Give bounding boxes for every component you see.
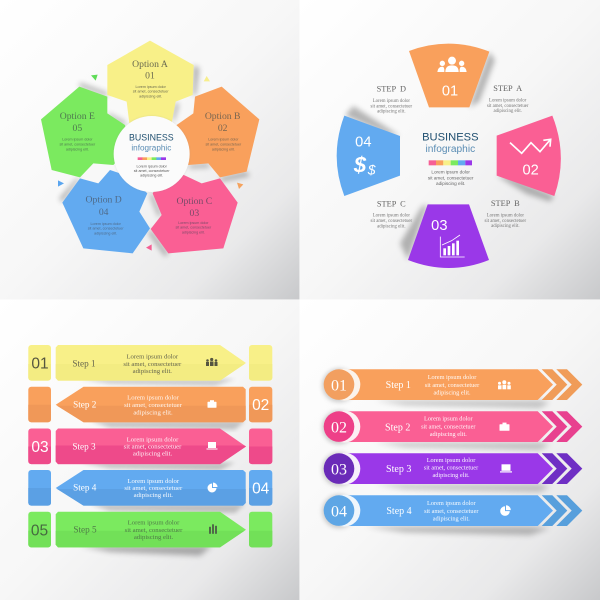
label option A: sit amet, consectetuer [133,90,169,94]
chevrons [542,411,582,442]
label step B: Lorem ipsum dolor [487,214,524,219]
text: Lorem ipsum dolor [428,374,477,381]
arrow: sit amet, consectetuer [124,444,182,450]
center heading: BUSINESS [129,133,174,143]
center text: sit amet, consectetuer [428,175,474,180]
icon: dollar signs: $ [367,161,376,177]
icon: people [437,57,467,72]
arrow: adipiscing elit. [133,451,173,458]
label option A: Option A [132,59,168,70]
label option B [205,111,242,151]
arrow: sit amet, consectetuer [125,527,183,534]
arrow: sit amet, consectetuer [123,361,182,368]
label option E: adipiscing elit. [66,147,89,151]
arrow: sit amet, consectetuer [124,485,183,492]
label option D: adipiscing elit. [94,231,117,235]
label step A: STEP A [493,84,522,93]
icon: pie chart [208,482,218,492]
color bar [138,157,166,160]
arrow [56,345,246,381]
icon: monitor [206,442,218,450]
left tab: 01 [31,356,49,372]
label step A: sit amet, consectetuer [487,104,529,109]
number badge [324,453,360,485]
text: Step 1 [386,380,411,391]
segment 01 orange [409,44,489,107]
right tab [249,470,272,506]
label option B: sit amet, consectetuer [205,143,242,147]
arrow: adipiscing elit. [133,368,172,375]
center text: adipiscing elit. [436,181,465,186]
pentagon D blue [62,170,150,253]
label option B: Lorem ipsum dolor [208,138,239,142]
row 4 blue [28,470,272,513]
right tab [249,387,272,422]
triangle markers [58,75,243,251]
label option E: 05 [73,123,82,134]
number badge [324,495,360,527]
panel: four step wheel [337,44,561,268]
panel: four ribbon steps [322,368,582,535]
arrow: Lorem ipsum dolor [126,354,179,360]
left tab: 03 [31,439,49,456]
ribbon 3 purple [322,452,582,492]
text: adipiscing elit. [430,431,467,438]
icon: people [498,380,511,389]
label option D: 04 [99,207,109,218]
chevrons [542,369,582,400]
color bar [429,160,472,165]
label option C: Option C [176,196,212,207]
label option A: adipiscing elit. [139,94,162,98]
text: Step 4 [386,506,412,517]
label option A: Lorem ipsum dolor [136,85,167,89]
icon: briefcase [500,423,510,431]
text: adipiscing elit. [433,515,470,522]
center title: infographic [425,144,475,155]
text: sit amet, consectetuer [424,508,479,515]
text: sit amet, consectetuer [421,423,476,430]
bar [348,453,553,484]
arrow: adipiscing elit. [134,534,174,541]
arrow [56,387,246,422]
label option D: sit amet, consectetuer [88,227,124,231]
icon: dollar signs: $ [353,153,367,178]
arrow: Lorem ipsum dolor [127,436,179,443]
label option E: Option E [60,111,95,122]
center circle [113,115,190,193]
icon: briefcase [208,400,216,408]
ribbon 4 blue [322,494,582,535]
icon: people [206,358,218,366]
label step B: STEP B [491,199,520,208]
pentagon C pink [151,172,238,253]
label step C: STEP C [377,199,406,208]
segment 04 blue [337,116,400,196]
left tab [28,428,51,464]
arrow: Lorem ipsum dolor [128,520,180,527]
label step D: adipiscing elit. [377,109,406,114]
center text [428,170,474,186]
arrow: Step 4 [73,482,97,492]
pentagon E green [41,87,130,177]
icon: bars [209,524,217,534]
arrow: adipiscing elit. [133,409,173,416]
text: adipiscing elit. [432,472,470,479]
center title: BUSINESS [422,131,479,143]
icon: dollar signs [353,153,376,178]
label option B: adipiscing elit. [212,147,235,151]
pentagon A yellow [107,41,194,123]
text [386,457,479,479]
segment 02 pink [497,116,561,196]
label step D: Lorem ipsum dolor [373,99,410,104]
text [386,374,480,396]
center title [422,131,479,155]
number 02: 02 [523,162,539,178]
arrow: Step 2 [73,400,97,410]
arrow [56,470,246,506]
number badge: 03 [331,461,347,478]
ribbon 2 pink [322,410,582,450]
left tab: 05 [31,522,48,539]
arrow: adipiscing elit. [134,492,173,499]
label option A [132,59,169,98]
label step A: Lorem ipsum dolor [489,99,527,104]
text [385,416,476,438]
row 3 pink [28,428,272,470]
label option B: Option B [205,111,241,122]
label step C: adipiscing elit. [377,224,406,229]
arrow [56,512,246,547]
right tab [249,428,272,464]
center text: sit amet, consectetuer [134,169,170,173]
arrow: Lorem ipsum dolor [127,478,180,485]
ribbon 1 orange [322,368,582,408]
label option B: 02 [218,123,228,134]
row 1 yellow [28,345,272,386]
label option C [175,196,212,234]
text: adipiscing elit. [433,389,471,396]
chevrons [542,453,582,484]
label option D: Lorem ipsum dolor [91,222,122,226]
arrow: sit amet, consectetuer [124,402,183,409]
label option E [59,111,96,151]
label step D: STEP D [377,85,406,94]
icon: pie chart [500,505,511,516]
text: Lorem ipsum dolor [427,457,476,464]
number badge: 04 [331,503,347,520]
bar [348,369,553,400]
left tab [28,345,51,381]
center text: adipiscing elit. [140,174,163,178]
number badge: 01 [331,377,347,394]
text: sit amet, consectetuer [425,382,480,389]
label step B: adipiscing elit. [491,224,520,229]
center subheading: infographic [131,144,171,153]
text: sit amet, consectetuer [424,464,479,471]
panel: pentagon options diagram [41,41,259,257]
chevrons [542,495,582,526]
arrow: Lorem ipsum dolor [127,395,180,402]
icon: monitor [500,464,512,472]
right tab [249,345,272,381]
label option A: 01 [145,71,155,82]
left tab [28,387,51,422]
label step C: Lorem ipsum dolor [373,214,410,219]
icon: zigzag arrow [510,139,551,153]
label step C [370,199,413,229]
text: Lorem ipsum dolor [424,416,474,423]
label option D: Option D [86,195,122,206]
panel: five step arrows [28,345,272,556]
right tab: 04 [252,480,270,498]
label option C: adipiscing elit. [182,230,205,234]
row 2 orange [28,387,272,430]
label option E: sit amet, consectetuer [59,143,96,147]
right tab [249,512,272,547]
arrow: Step 1 [72,358,96,368]
label option E: Lorem ipsum dolor [62,138,93,142]
number 03: 03 [431,218,447,234]
bar [348,495,553,526]
label step B: sit amet, consectetuer [484,219,527,224]
left tab [28,470,51,506]
bar [348,411,553,442]
text: Lorem ipsum dolor [427,500,477,507]
arrow: Step 3 [72,442,96,452]
arrow: Step 5 [73,524,97,534]
label step C: sit amet, consectetuer [370,219,413,224]
text [386,500,479,522]
number badge [324,411,360,443]
text: Step 3 [386,464,411,475]
right tab: 02 [252,397,269,414]
label option C: sit amet, consectetuer [175,226,212,230]
label step A [487,84,529,114]
center text: Lorem ipsum dolor [137,164,168,168]
icon: bar chart [440,235,465,257]
segment 03 purple [408,204,489,268]
number badge: 02 [331,419,347,436]
pentagon B orange [170,87,259,177]
label step D: sit amet, consectetuer [370,104,413,109]
label option C: Lorem ipsum dolor [178,221,209,225]
label option C: 03 [190,208,199,219]
left tab [28,512,51,547]
label step A: adipiscing elit. [493,109,522,114]
number 01: 01 [442,84,458,100]
label option D [86,195,124,235]
row 5 green [28,512,272,556]
number badge [324,369,360,401]
center text: Lorem ipsum dolor [431,170,470,175]
center text [134,164,170,178]
label step D [370,85,413,114]
number 04: 04 [355,134,371,150]
arrow [56,428,246,464]
text: Step 2 [385,422,410,433]
label step B [484,199,527,229]
